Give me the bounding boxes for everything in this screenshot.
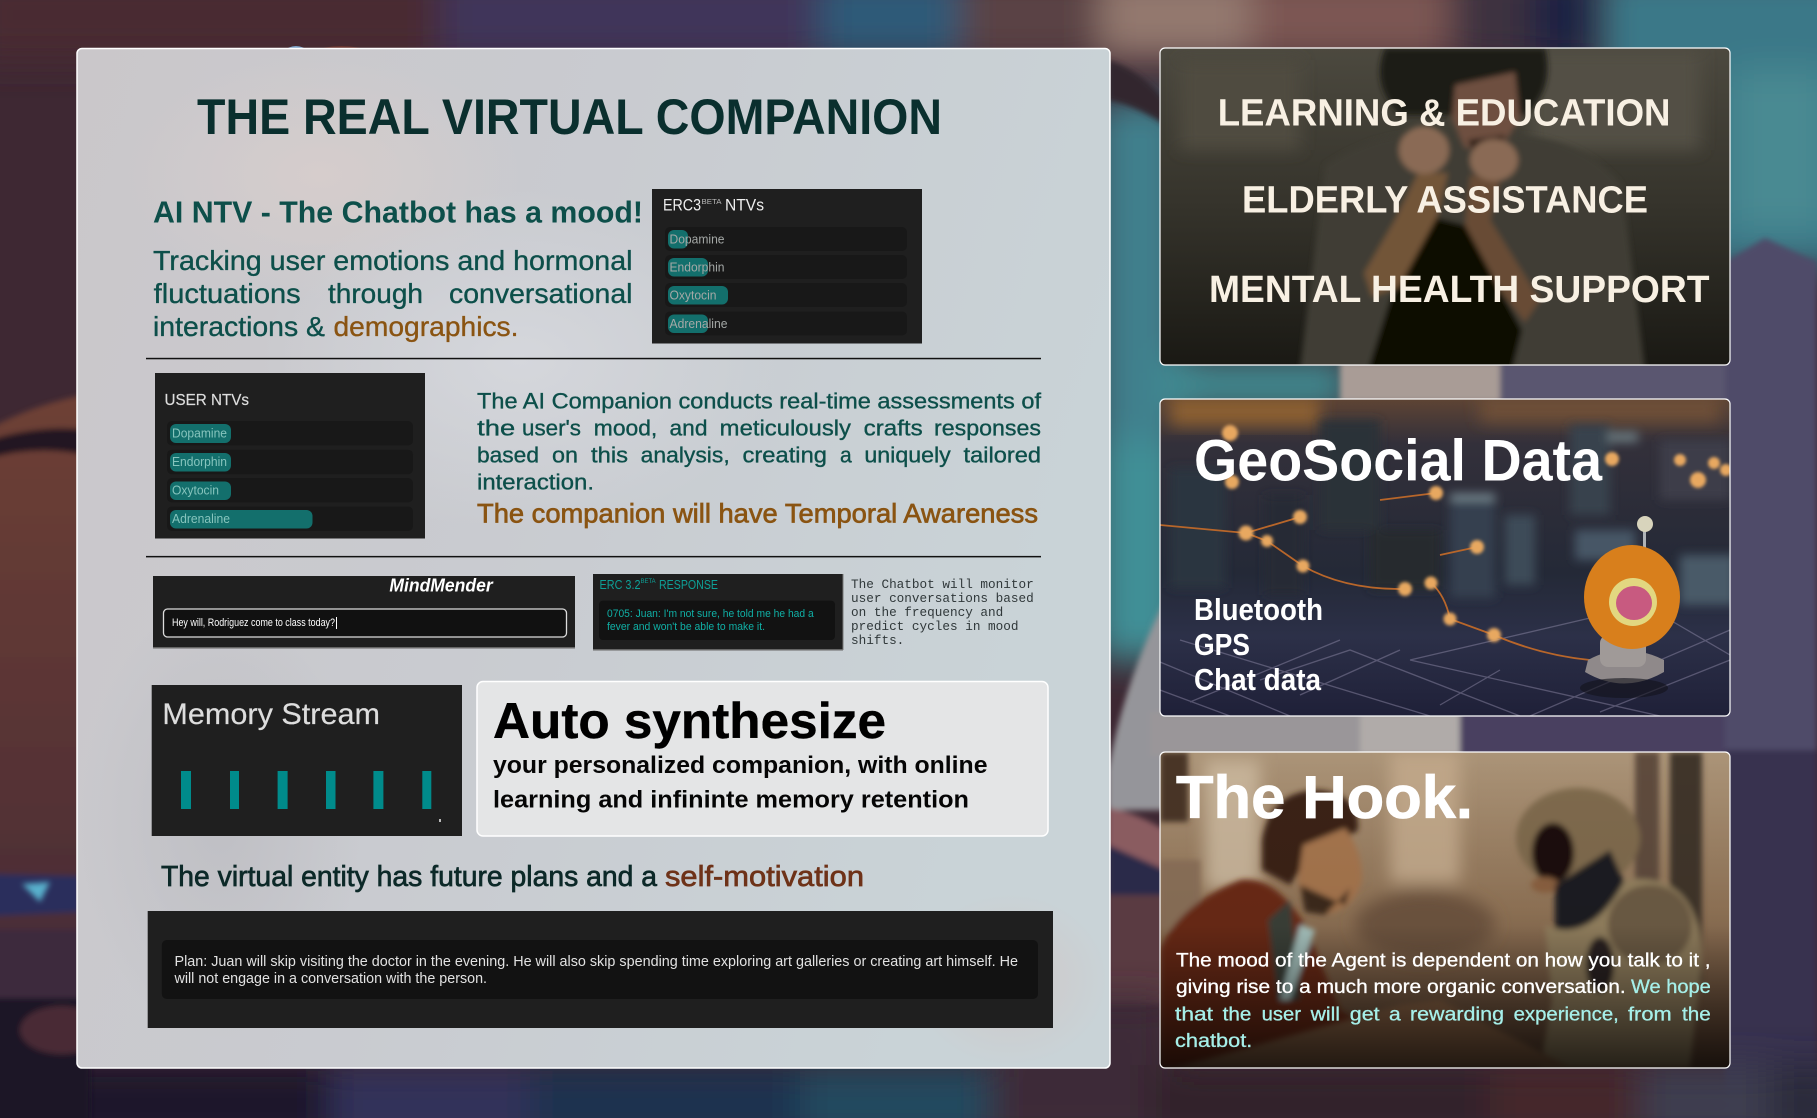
text block: agent mood — [1175, 951, 1711, 1052]
text block: tracking emotions: conversational — [449, 278, 632, 309]
panel: ERC 3.2 response: RESPONSE — [659, 577, 718, 592]
text block: real-time assessments — [477, 388, 1042, 495]
text block: real-time assessments: meticulously — [720, 416, 852, 440]
top strip colours — [0, 0, 1600, 60]
bar: user oxytocin: Oxytocin — [172, 484, 219, 498]
panel: memory stream — [152, 685, 462, 836]
text block: tracking emotions: interactions & — [153, 311, 325, 342]
card: learning, elderly, mental health: MENTAL HEALTH SUPPORT — [1209, 269, 1710, 311]
panel: ERC 3.2 response: ERC 3.2 — [600, 577, 640, 592]
bar: adrenaline: Adrenaline — [670, 317, 728, 331]
panel: ERC3 NTVs: ERC3 — [663, 196, 701, 215]
bar: endorphin: Endorphin — [670, 260, 725, 274]
text block: tracking emotions: fluctuations — [154, 278, 301, 309]
panel: main content — [77, 48, 1110, 1068]
text block: real-time assessments: tailored — [964, 443, 1041, 468]
text block: real-time assessments: crafts — [864, 416, 923, 440]
text block: real-time assessments: based — [477, 443, 539, 468]
memory bars — [181, 771, 431, 809]
text block: real-time assessments: uniquely — [864, 443, 952, 468]
chat input box: Hey will, Rodriguez come to class today? — [172, 617, 335, 629]
chat input box — [164, 609, 566, 637]
text block: agent mood: the — [1223, 1005, 1251, 1026]
panel: ERC 3.2 response — [593, 574, 844, 650]
card: geosocial data — [1160, 396, 1735, 716]
panel: auto synthesize: Auto synthesize — [493, 693, 886, 749]
heading: chatbot mood: AI NTV - The Chatbot has a mood! — [153, 194, 643, 230]
shirt, skin, and jacket — [1108, 60, 1817, 1118]
panel: MindMender chat: MindMender — [389, 576, 494, 596]
card: the hook — [1160, 752, 1730, 1068]
panel: USER NTVs — [155, 373, 425, 538]
list: data sources — [1194, 592, 1323, 697]
text block: monitor conversations: The Chatbot will monitor — [851, 577, 1034, 592]
bar: user dopamine: Dopamine — [172, 426, 227, 440]
bar: oxytocin — [668, 286, 728, 304]
panel: plan: will not engage in a conversation with the person. — [174, 971, 487, 987]
text block: agent mood: The mood of the Agent is dependent on how you talk to it , — [1176, 951, 1710, 972]
panel: MindMender chat — [153, 576, 575, 648]
text block: real-time assessments: responses — [934, 416, 1041, 440]
text block: agent mood: user — [1262, 1005, 1302, 1026]
teal backdrop on right — [1095, 0, 1817, 660]
image: distressed man — [1160, 48, 1730, 370]
text block: real-time assessments: and — [670, 416, 708, 440]
text block: real-time assessments: analysis, — [641, 443, 730, 468]
robot in left margin — [0, 394, 104, 1118]
bottom strip colours — [0, 1000, 1817, 1118]
text block: agent mood: giving rise to a much more organic conversation. — [1176, 977, 1626, 998]
panel: ERC3 NTVs — [652, 189, 922, 344]
text block: monitor conversations — [851, 577, 1034, 648]
card: learning, elderly, mental health — [1160, 48, 1730, 370]
text block: agent mood: rewarding — [1410, 1005, 1504, 1026]
panel: plan — [148, 911, 1053, 1028]
text block: agent mood: a — [1389, 1005, 1401, 1026]
bar: oxytocin: Oxytocin — [670, 288, 717, 302]
text block: real-time assessments: this — [591, 443, 628, 468]
text block: tracking emotions: through — [328, 278, 423, 309]
text block: agent mood: get — [1350, 1005, 1380, 1026]
panel: ERC 3.2 response: BETA — [641, 579, 656, 585]
panel: auto synthesize: learning and infininte memory retention — [493, 787, 969, 814]
card text lines: LEARNING & EDUCATION — [1218, 93, 1670, 135]
text block: real-time assessments: The AI Companion conducts real-time assessments of — [477, 388, 1042, 414]
panel: auto synthesize — [477, 682, 1048, 836]
text block: agent mood: We hope — [1631, 977, 1711, 998]
bar: user oxytocin — [170, 482, 231, 500]
bar: user dopamine — [170, 424, 231, 443]
text block: real-time assessments: user's — [522, 416, 581, 440]
text block: agent mood: that — [1175, 1005, 1214, 1026]
text block: tracking emotions — [153, 245, 632, 342]
text block: real-time assessments: a — [840, 443, 852, 468]
panel: ERC 3.2 response: 0705: Juan: I'm not sure, he told me he had a — [607, 608, 815, 620]
icon: orange target beacon — [1580, 516, 1680, 698]
bar: user endorphin: Endorphin — [172, 455, 227, 469]
heading: GeoSocial Data: GeoSocial Data — [1194, 429, 1603, 494]
title: THE REAL VIRTUAL COMPANION — [197, 89, 942, 145]
text block: tracking emotions: Tracking user emotions and hormonal — [153, 245, 632, 276]
text block: real-time assessments: on — [552, 443, 578, 468]
text block: monitor conversations: on the frequency and — [851, 605, 1003, 620]
panel: ERC 3.2 response: fever and won't be able to make it. — [607, 621, 765, 633]
image: man and robot at cafe — [1160, 752, 1730, 1068]
text block: agent mood: experience, — [1514, 1005, 1619, 1026]
bar: dopamine: Dopamine — [670, 232, 725, 246]
panel: USER NTVs: USER NTVs — [164, 392, 249, 409]
text block: real-time assessments: the — [477, 416, 515, 440]
image: glowing city map — [1160, 396, 1735, 716]
list: data sources: Chat data — [1194, 662, 1322, 697]
text block: monitor conversations: predict cycles in mood — [851, 619, 1019, 634]
text block: monitor conversations: user conversations based — [851, 591, 1034, 606]
bar: user adrenaline: Adrenaline — [172, 512, 230, 526]
card: learning, elderly, mental health: ELDERLY ASSISTANCE — [1242, 180, 1648, 222]
text block: real-time assessments: creating — [742, 443, 827, 468]
text block: agent mood: the — [1682, 1005, 1711, 1026]
text block: agent mood: chatbot. — [1175, 1031, 1252, 1052]
panel: memory stream: Memory Stream — [162, 698, 380, 731]
text: future plans: The virtual entity has future plans and a — [161, 861, 658, 893]
panel: ERC3 NTVs: BETA — [702, 197, 722, 206]
text block: real-time assessments: mood, — [594, 416, 657, 440]
panel: plan: Plan: Juan will skip visiting the doctor in the evening. He will also skip spending time exploring art galleries or creating art himself. He — [174, 954, 1018, 970]
text block: agent mood: will — [1310, 1005, 1340, 1026]
list: data sources: GPS — [1194, 627, 1250, 662]
text block: real-time assessments: interaction. — [477, 470, 594, 495]
panel: ERC3 NTVs: NTVs — [725, 196, 764, 215]
bar: user adrenaline — [170, 510, 312, 528]
text block: agent mood: from — [1628, 1005, 1672, 1026]
text: temporal awareness: The companion will have Temporal Awareness — [477, 498, 1038, 528]
text: future plans: self-motivation — [665, 861, 864, 893]
panel: auto synthesize: your personalized companion, with online — [493, 752, 988, 779]
heading: The Hook: The Hook. — [1176, 764, 1473, 831]
list: data sources: Bluetooth — [1194, 592, 1323, 627]
text block: tracking emotions: demographics. — [334, 311, 518, 342]
blurred city blocks — [1170, 420, 1735, 605]
text block: monitor conversations: shifts. — [851, 633, 904, 648]
